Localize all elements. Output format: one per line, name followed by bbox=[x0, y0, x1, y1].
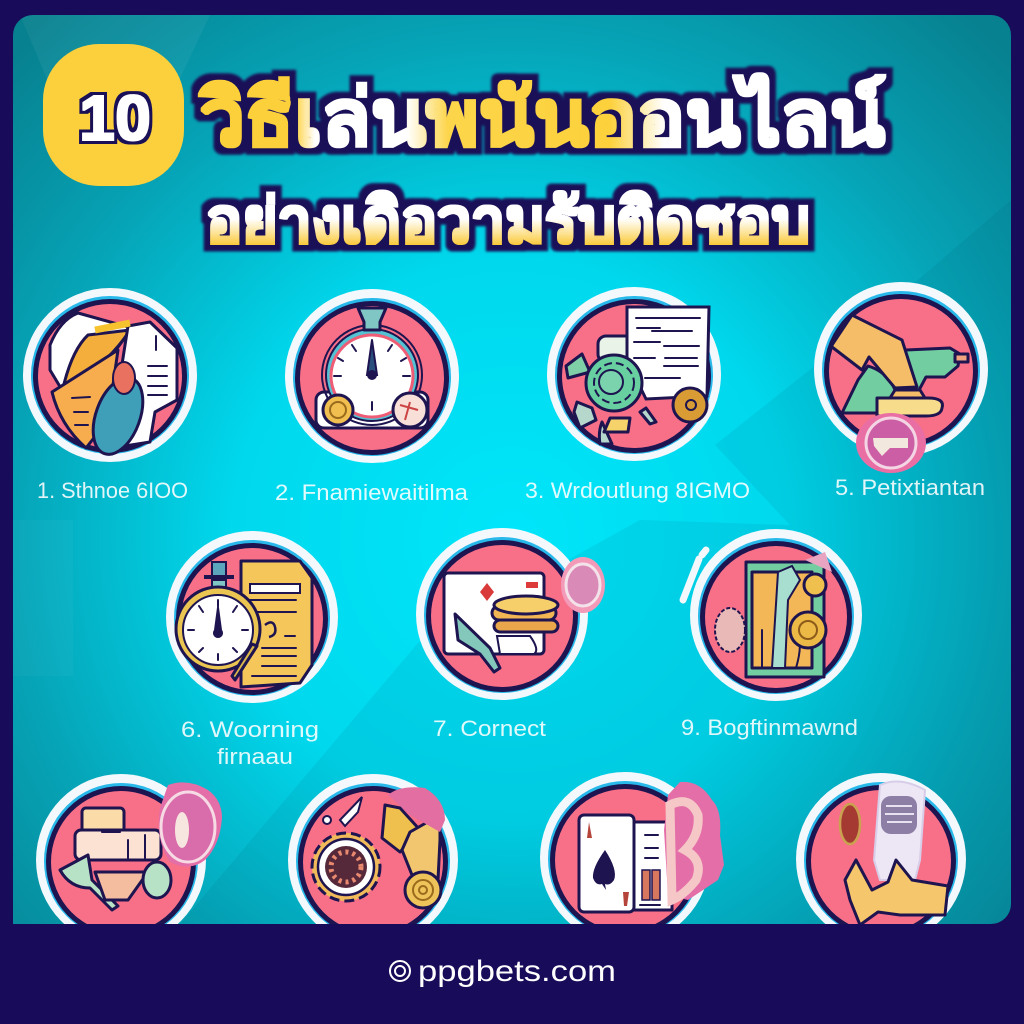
icon 4: hand pressing stamp bbox=[814, 282, 988, 473]
footer website text: ppgbets.com bbox=[418, 955, 616, 988]
icon 1: hand and document bbox=[23, 288, 197, 462]
title line 1: วิธีเล่นพนันออนไลน์ bbox=[199, 73, 886, 162]
logo badge: 10: 10 bbox=[79, 82, 151, 154]
icon 3: poker chip and document bbox=[547, 287, 721, 461]
label 7: 7. Cornect bbox=[433, 716, 546, 741]
label 3: 3. Wrdoutlung 8IGMO bbox=[525, 478, 750, 503]
label 2: 2. Fnamiewaitilma bbox=[275, 480, 469, 505]
logo badge: 10 bbox=[43, 44, 184, 186]
label 6: 6. Woorning bbox=[181, 717, 319, 742]
icon 13: hand holding capsule bbox=[796, 773, 966, 924]
label 9: 9. Bogftinmawnd bbox=[681, 715, 858, 740]
footer bar bbox=[0, 924, 1024, 1024]
icon 2: stopwatch and coins bbox=[285, 289, 459, 463]
label 6 bbox=[181, 717, 319, 769]
label 6: firnaau bbox=[217, 744, 293, 769]
label 5: 5. Petixtiantan bbox=[835, 475, 985, 500]
icon 9: framed picture and coin bbox=[683, 529, 862, 701]
label 1: 1. Sthnoe 6IOO bbox=[37, 478, 188, 503]
title line 2: อย่างเดิอวามรับติดชอบ bbox=[206, 187, 810, 256]
icon 12: spade card and document bbox=[540, 772, 724, 924]
icon 11: gear, coins and rings bbox=[288, 774, 458, 924]
icon 6: pocket watch and document bbox=[166, 531, 338, 703]
icon 10: tools and documents bbox=[36, 774, 222, 924]
icon 7: card, coins and tool bbox=[416, 528, 605, 700]
